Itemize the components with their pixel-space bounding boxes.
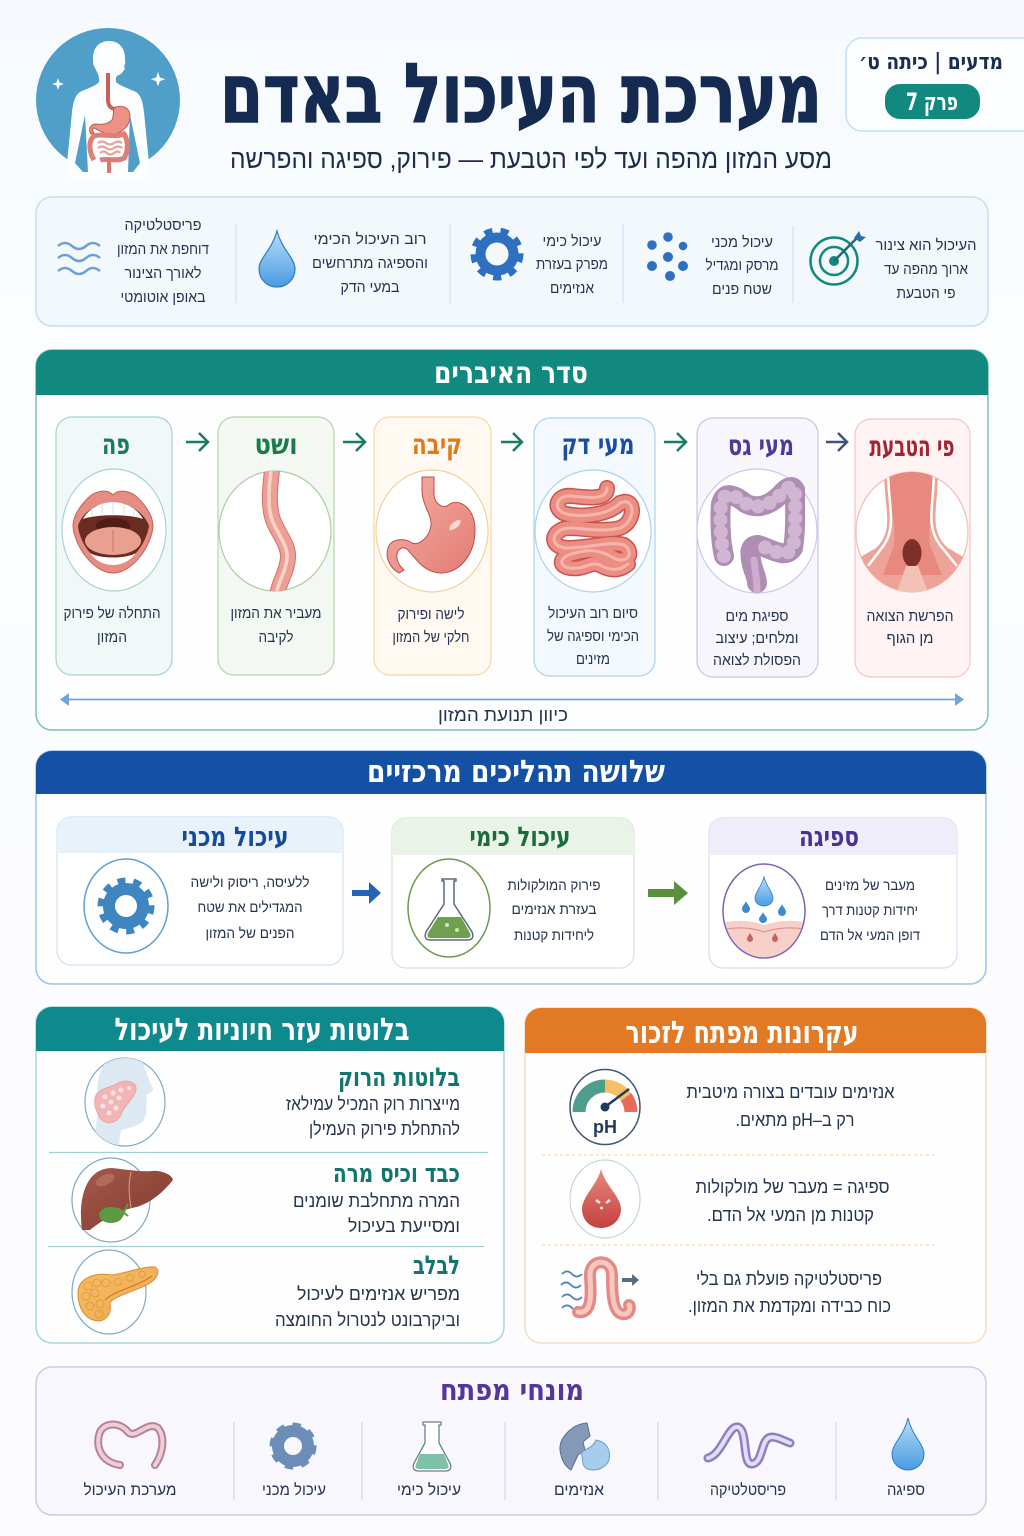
process card: absorption: יחידות קטנות דרך (822, 903, 918, 919)
organ card: anus: הפרשת הצואה (866, 608, 954, 625)
principle: absorption: ספיגה = מעבר של מולקולות (696, 1177, 890, 1197)
arrow (186, 433, 208, 451)
principle: peristalsis: כוח כבידה ומקדמת את המזון. (688, 1296, 891, 1316)
gland: liver and gallbladder: כבד וכיס מרה (333, 1159, 460, 1189)
principle: pH (570, 1070, 895, 1144)
arrow (664, 433, 686, 451)
term: peristalsis: פריסטלטיקה (710, 1481, 786, 1499)
term: mechanical digestion (262, 1425, 326, 1499)
organ card: small intestine: מזינים (576, 651, 610, 668)
gland: salivary (85, 1055, 460, 1150)
process card: chemical: עיכול כימי (470, 822, 570, 853)
process card: chemical: ליחידות קטנות (514, 927, 594, 944)
overview item: small intestine: במעי הדק (340, 279, 400, 296)
process card: absorption: מעבר של מזינים (825, 877, 915, 894)
gland: salivary: בלוטות הרוק (338, 1063, 460, 1093)
direction arrow (60, 693, 964, 706)
overview item: mechanical digestion: מרסק ומגדיל (706, 257, 778, 274)
overview item: peristalsis: דוחפת את המזון (117, 241, 209, 258)
process card: mechanical: ללעיסה, ריסוק ולישה (190, 874, 310, 891)
term: absorption (887, 1418, 925, 1499)
process card: chemical (392, 818, 634, 968)
section heading: עקרונות מפתח לזכור (626, 1015, 858, 1051)
organ card: stomach: חלקי של המזון (392, 629, 470, 646)
overview item: goal: ארוך מהפה עד (884, 261, 969, 278)
organ card: small intestine (534, 418, 655, 676)
panel: overview (36, 197, 988, 326)
gland: liver and gallbladder (72, 1158, 460, 1242)
section heading: מונחי מפתח (440, 1373, 584, 1407)
gland: pancreas: מפריש אנזימים לעיכול (297, 1284, 460, 1304)
organ card: small intestine: מעי דק (562, 428, 634, 461)
arrow (352, 882, 381, 904)
overview item: goal (810, 231, 976, 302)
organ card: anus (852, 419, 972, 677)
gland: liver and gallbladder: המרה מתחלבת שומנים (293, 1191, 460, 1211)
process card: chemical: בעזרת אנזימים (512, 902, 597, 918)
term: absorption: ספיגה (887, 1482, 925, 1499)
process card: mechanical: עיכול מכני (182, 822, 288, 853)
organ card: large intestine: הפסולת לצואה (713, 652, 801, 669)
organ card: mouth: התחלה של פירוק (64, 605, 160, 622)
panel: three main processes (36, 751, 986, 984)
process card: chemical: פירוק המולקולות (508, 877, 601, 894)
organ card: mouth: פה (102, 428, 130, 461)
organ card: mouth (56, 417, 172, 675)
overview item: peristalsis: לאורך הצינור (124, 265, 202, 282)
overview item: chemical digestion: מפרק בעזרת (536, 256, 608, 273)
principle: peristalsis: פריסטלטיקה פועלת גם בלי (696, 1269, 882, 1289)
overview item: peristalsis (58, 217, 209, 306)
organ card: esophagus (218, 417, 334, 675)
organ card: stomach (374, 417, 491, 675)
overview item: mechanical digestion: שטח פנים (712, 281, 772, 298)
arrow (826, 433, 847, 451)
panel: key principles (525, 1008, 986, 1343)
organ card: mouth: המזון (97, 629, 127, 646)
organ card: small intestine: סיום רוב העיכול (548, 605, 638, 622)
badge: subject and chapter (846, 38, 1024, 131)
term: enzymes: אנזימים (554, 1482, 604, 1499)
overview item: mechanical digestion: עיכול מכני (711, 234, 773, 251)
gland: liver and gallbladder: ומסייעת בעיכול (348, 1216, 460, 1236)
organ card: esophagus: לקיבה (258, 629, 294, 646)
principle: peristalsis (561, 1262, 891, 1316)
gland: salivary: מייצרות רוק המכיל עמילאז (286, 1094, 460, 1114)
process card: mechanical: הפנים של המזון (206, 925, 294, 942)
gland: pancreas: לבלב (413, 1251, 460, 1281)
term: peristalsis (708, 1427, 790, 1499)
term: mechanical digestion: עיכול מכני (262, 1481, 326, 1499)
principle: pH: רק ב–pH מתאים. (736, 1110, 854, 1130)
organ card: esophagus: מעביר את המזון (230, 605, 322, 622)
organ card: large intestine: ומלחים; עיצוב (716, 630, 798, 647)
term: enzymes (554, 1423, 609, 1499)
overview item: goal: פי הטבעת (896, 285, 956, 302)
gland: salivary: להתחלת פירוק העמילן (309, 1119, 460, 1139)
panel: key terms (36, 1367, 986, 1515)
title: מערכת העיכול באדם (220, 47, 822, 142)
overview item: peristalsis: פריסטלטיקה (124, 217, 202, 234)
overview item: small intestine: רוב העיכול הכימי (314, 231, 426, 248)
header icon: human digestive system (36, 28, 180, 180)
overview item: small intestine (259, 231, 428, 296)
gland: pancreas (72, 1250, 460, 1334)
overview item: small intestine: והספיגה מתרחשים (312, 255, 428, 272)
arrow (501, 433, 522, 451)
term: chemical digestion: עיכול כימי (397, 1481, 461, 1499)
subtitle: מסע המזון מהפה ועד לפי הטבעת — פירוק, ספיגה והפרשה (230, 144, 832, 174)
organ card: large intestine: מעי גס (728, 429, 794, 462)
organ card: anus: פי הטבעת (870, 430, 954, 463)
overview item: chemical digestion: אנזימים (550, 280, 595, 297)
panel: accessory glands (36, 1007, 504, 1343)
section heading: שלושה תהליכים מרכזיים (367, 754, 665, 790)
arrow (648, 881, 688, 905)
overview item: chemical digestion (474, 230, 608, 297)
badge: subject and chapter: פרק 7 (906, 88, 958, 116)
principle: absorption (570, 1160, 890, 1238)
principle: pH: אנזימים עובדים בצורה מיטבית (686, 1082, 895, 1102)
organ card: stomach: קיבה (412, 428, 462, 461)
term: chemical digestion (397, 1422, 461, 1499)
process card: absorption: דופן המעי אל הדם (820, 927, 920, 944)
overview item: chemical digestion: עיכול כימי (542, 233, 602, 250)
direction label: כיוון תנועת המזון (438, 705, 568, 725)
arrow (343, 433, 365, 451)
section heading: בלוטות עזר חיוניות לעיכול (114, 1012, 410, 1048)
organ card: large intestine (697, 418, 818, 677)
overview item: goal: העיכול הוא צינור (876, 237, 976, 254)
organ card: esophagus: ושט (254, 428, 298, 461)
gland: pancreas: וביקרבונט לנטרול החומצה (275, 1310, 460, 1330)
principle: pH: pH (593, 1117, 617, 1137)
overview item: peristalsis: באופן אוטומטי (120, 289, 206, 306)
panel: order of organs (36, 350, 988, 730)
organ card: large intestine: ספיגת מים (726, 608, 789, 625)
term: digestive system: מערכת העיכול (84, 1481, 176, 1499)
organ card: small intestine: הכימי וספיגה של (547, 628, 639, 645)
organ card: stomach: לישה ופירוק (398, 606, 465, 623)
organ card: anus: מן הגוף (886, 630, 934, 647)
section heading: סדר האיברים (434, 356, 588, 391)
process card: absorption (709, 818, 957, 968)
principle: absorption: קטנות מן המעי אל הדם. (707, 1205, 874, 1225)
process card: mechanical (57, 817, 343, 965)
term: digestive system (84, 1424, 176, 1499)
process card: absorption: ספיגה (799, 822, 859, 853)
overview item: mechanical digestion (647, 232, 778, 298)
process card: mechanical: המגדילים את שטח (198, 899, 302, 916)
